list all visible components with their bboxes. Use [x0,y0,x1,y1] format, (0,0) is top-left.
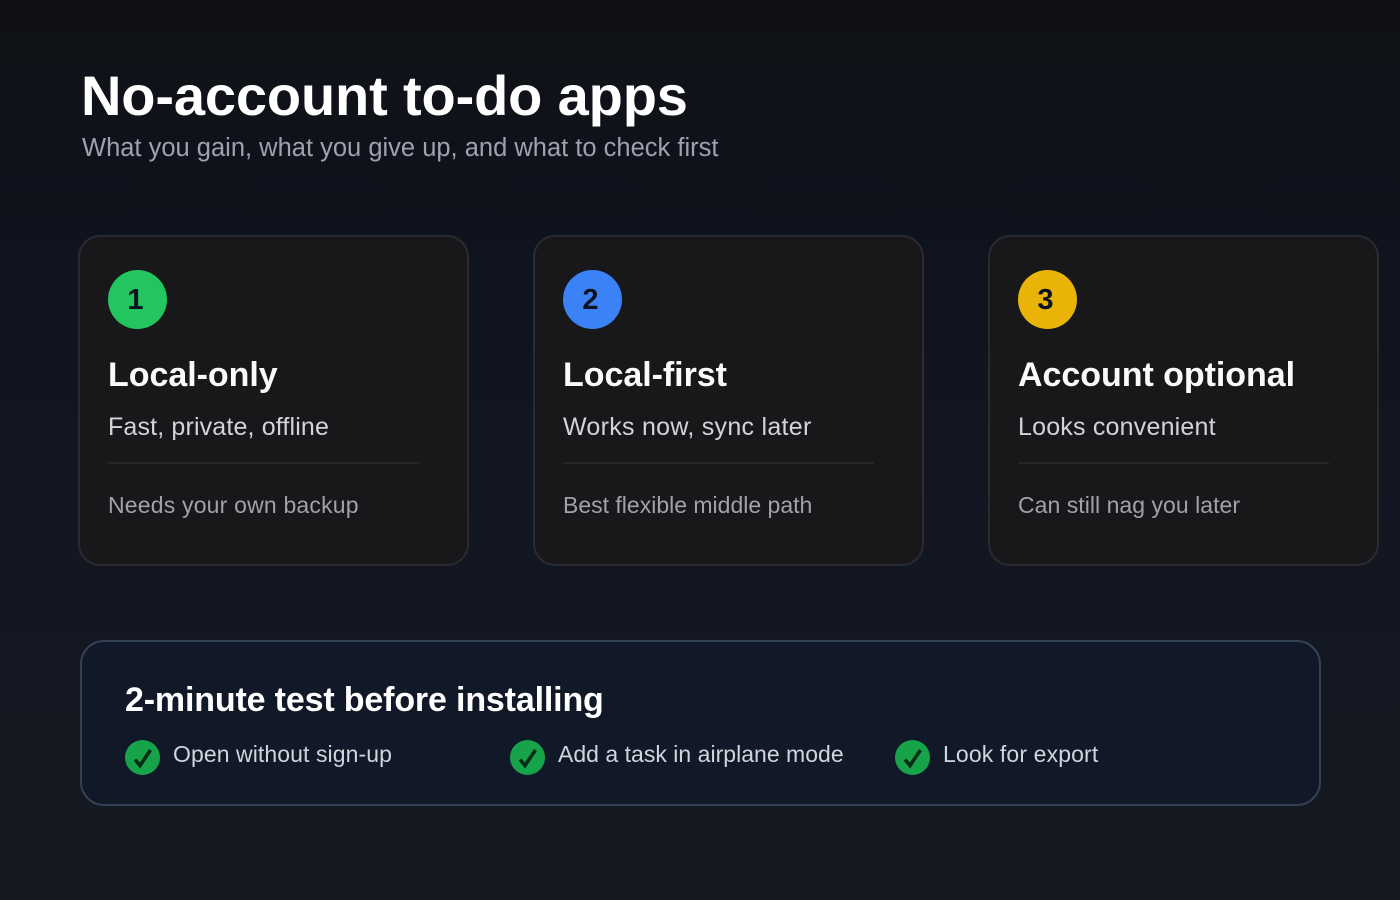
note: local-first: Best flexible middle path [563,492,812,518]
title: No-account to-do apps [81,64,688,127]
badge: 1: 1 [127,284,144,316]
badge: 2: 2 [582,284,599,316]
note: local-only: Needs your own backup [108,492,359,518]
panel: local-first [533,235,924,566]
benefit: local-only: Fast, private, offline [108,413,329,441]
note: account optional: Can still nag you later [1018,492,1240,518]
benefit: account optional: Looks convenient [1018,413,1216,441]
panel: local-only [78,235,469,566]
panel: account optional [988,235,1379,566]
icon: check 2 [510,740,545,775]
icon: check 1 [125,740,160,775]
item: sign-up: Open without sign-up [173,741,392,767]
item: export: Look for export [943,741,1098,767]
heading: local-first: Local-first [563,356,727,394]
item: airplane mode: Add a task in airplane mode [558,741,844,767]
icon: check 3 [895,740,930,775]
subtitle: What you gain, what you give up, and what to check first [82,134,718,162]
badge: 3 [1018,270,1077,329]
badge: 2 [563,270,622,329]
benefit: local-first: Works now, sync later [563,413,812,441]
panel: 2-minute test [80,640,1321,806]
badge: 1 [108,270,167,329]
badge: 3: 3 [1037,284,1054,316]
heading: local-only: Local-only [108,356,278,394]
heading: account optional: Account optional [1018,356,1295,394]
heading: 2-minute test: 2-minute test before installing [125,681,604,719]
